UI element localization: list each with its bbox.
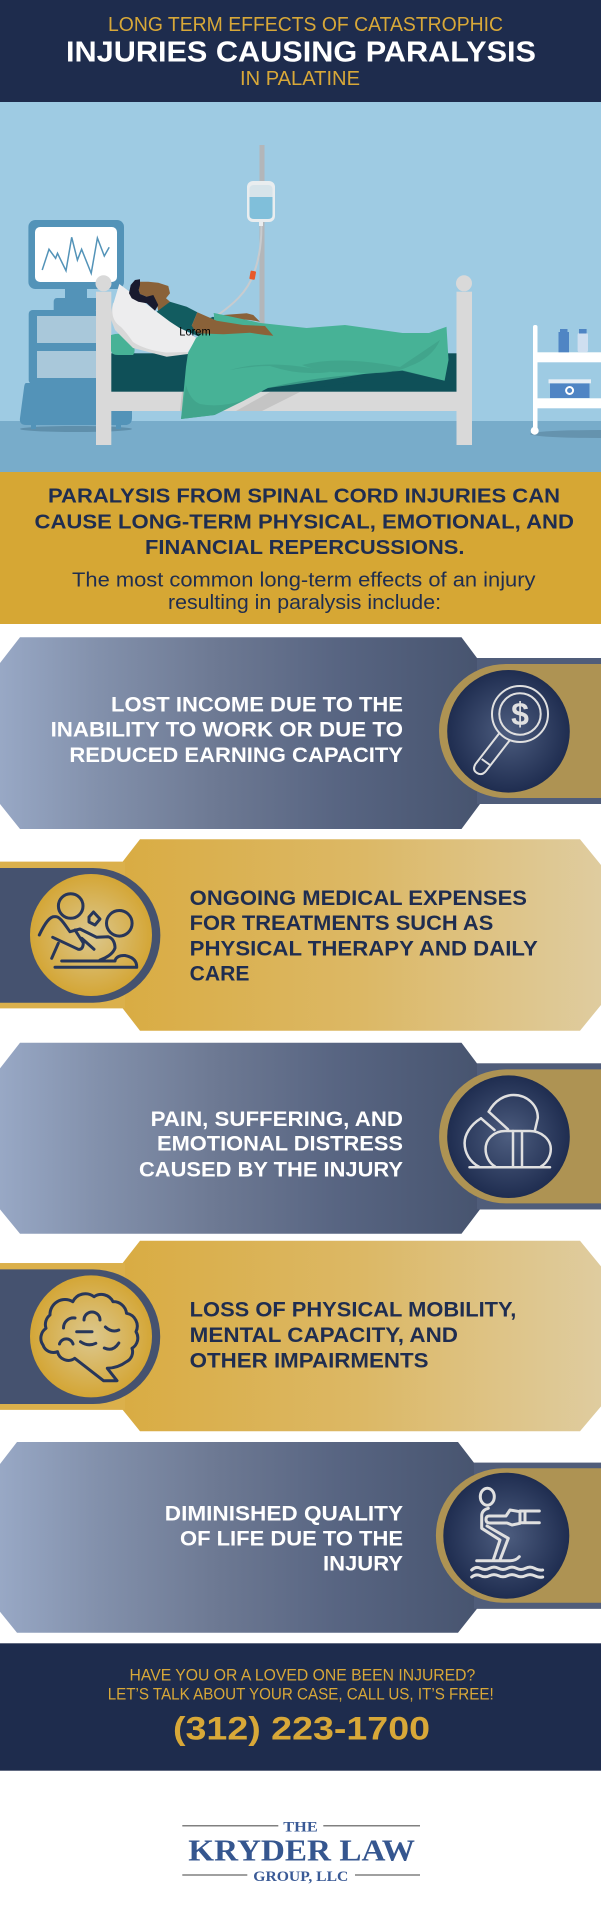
- text: FOR TREATMENTS SUCH AS: [190, 912, 493, 935]
- text: DIMINISHED QUALITY: [165, 1503, 403, 1526]
- title line 2: INJURIES CAUSING PARALYSIS: [66, 37, 536, 69]
- text: [190, 887, 538, 986]
- call to action footer: [0, 1643, 601, 1771]
- call to action text: LET’S TALK ABOUT YOUR CASE, CALL US, IT’S FREE!: [108, 1686, 494, 1704]
- title line 1: LONG TERM EFFECTS OF CATASTROPHIC: [108, 14, 503, 36]
- intro heading: PARALYSIS FROM SPINAL CORD INJURIES CAN: [48, 486, 560, 508]
- text: INJURY: [323, 1553, 403, 1576]
- panel: loss of mobility: [0, 1241, 601, 1431]
- icon: water skier: [443, 1473, 569, 1599]
- text: [165, 1503, 403, 1576]
- logo: KRYDER LAW: [188, 1833, 415, 1868]
- green blanket: [181, 313, 448, 419]
- phone number: (312) 223-1700: [173, 1710, 430, 1746]
- panel: medical expenses: [0, 839, 601, 1031]
- text: INABILITY TO WORK OR DUE TO: [51, 719, 403, 742]
- text: [190, 1299, 516, 1372]
- arm: [192, 312, 273, 336]
- intro text: [72, 569, 536, 614]
- text: [51, 694, 403, 767]
- text: CAUSED BY THE INJURY: [139, 1159, 403, 1182]
- blanket fold over arm: [213, 313, 257, 325]
- icon: heart monitor machine: [20, 220, 132, 432]
- stray label: Lorem: [179, 325, 211, 339]
- pillows: [110, 284, 197, 357]
- medical cart: [530, 325, 601, 438]
- text: [139, 1108, 403, 1182]
- text: OTHER IMPAIRMENTS: [190, 1349, 428, 1372]
- intro heading: CAUSE LONG-TERM PHYSICAL, EMOTIONAL, AND: [34, 512, 574, 534]
- panel: lost income: [0, 637, 601, 829]
- text: ONGOING MEDICAL EXPENSES: [190, 887, 527, 910]
- patient: [129, 279, 260, 337]
- header: [0, 0, 601, 102]
- text: OF LIFE DUE TO THE: [180, 1528, 403, 1551]
- panel: pain and suffering: [0, 1043, 601, 1234]
- hospital bed: [96, 275, 472, 445]
- call to action text: HAVE YOU OR A LOVED ONE BEEN INJURED?: [130, 1667, 475, 1685]
- intro panel: [0, 472, 601, 624]
- icon: pills: [447, 1075, 570, 1198]
- text: MENTAL CAPACITY, AND: [190, 1324, 458, 1347]
- icon: magnifying glass with dollar: $: [511, 696, 529, 732]
- panel: quality of life: [0, 1442, 601, 1633]
- icon: IV stand: [218, 145, 275, 325]
- text: LOSS OF PHYSICAL MOBILITY,: [190, 1299, 516, 1322]
- intro text: resulting in paralysis include:: [168, 591, 441, 614]
- logo: GROUP, LLC: [253, 1869, 348, 1885]
- text: PAIN, SUFFERING, AND: [151, 1108, 403, 1131]
- icon: physical therapy: [30, 874, 152, 996]
- text: REDUCED EARNING CAPACITY: [69, 744, 403, 767]
- intro text: The most common long-term effects of an injury: [72, 569, 536, 592]
- icon: magnifying glass with dollar: [447, 670, 570, 793]
- intro heading: FINANCIAL REPERCUSSIONS.: [145, 537, 464, 559]
- title line 3: IN PALATINE: [240, 68, 360, 90]
- call to action text: [108, 1667, 494, 1704]
- text: EMOTIONAL DISTRESS: [157, 1133, 403, 1156]
- text: LOST INCOME DUE TO THE: [111, 694, 403, 717]
- text: PHYSICAL THERAPY AND DAILY: [190, 937, 538, 960]
- intro heading: [34, 486, 574, 559]
- logo: THE: [283, 1820, 318, 1836]
- hospital illustration: [0, 102, 601, 472]
- icon: brain: [30, 1275, 152, 1397]
- text: CARE: [190, 963, 250, 986]
- logo: [182, 1820, 420, 1885]
